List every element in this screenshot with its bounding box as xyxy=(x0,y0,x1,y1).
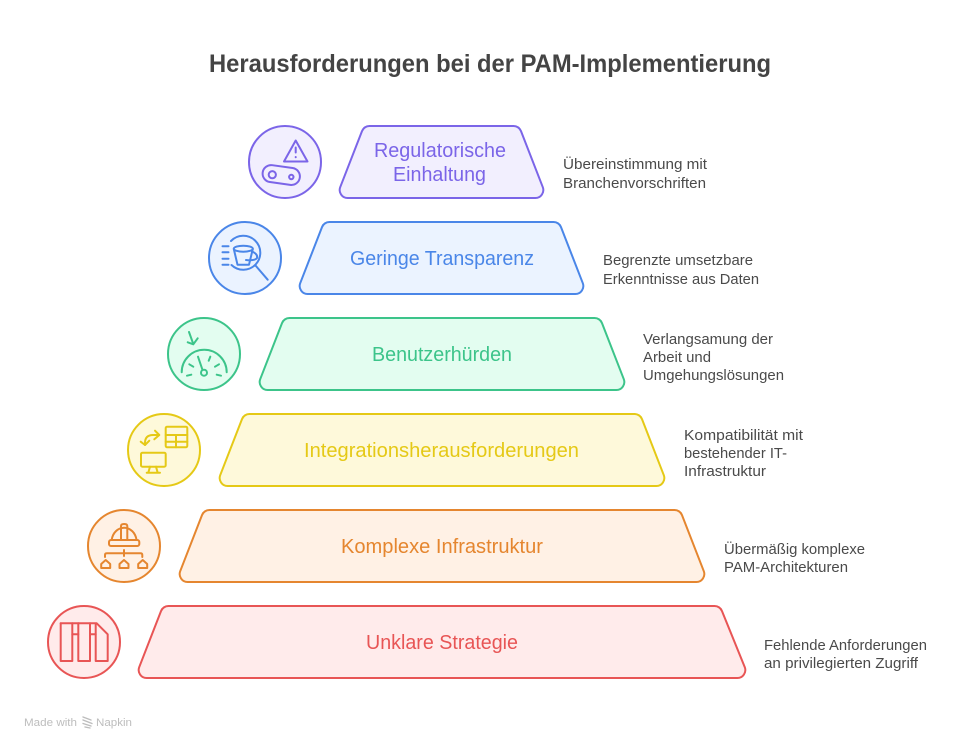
title: Herausforderungen bei der PAM-Implementierung xyxy=(209,50,771,78)
icon: strategy floor plan xyxy=(48,606,120,678)
label: Integrationsherausforderungen: Integrationsherausforderungen xyxy=(304,440,579,462)
description: Benutzerhürden: Arbeit und xyxy=(643,349,711,366)
description: Unklare Strategie xyxy=(764,637,927,672)
trapezoid: Komplexe Infrastruktur xyxy=(180,510,704,582)
label: Unklare Strategie: Unklare Strategie xyxy=(366,632,518,654)
description: Benutzerhürden: Verlangsamung der xyxy=(643,331,773,348)
panel: Benutzerhürden xyxy=(168,318,784,390)
footer: Made with Napkin: Napkin xyxy=(96,717,132,729)
panel: Geringe Transparenz xyxy=(209,222,759,294)
description: Geringe Transparenz xyxy=(603,252,759,288)
description: Regulatorische Einhaltung xyxy=(563,155,708,192)
description: Regulatorische Einhaltung: Übereinstimmung mit xyxy=(563,155,708,173)
panel: Komplexe Infrastruktur xyxy=(88,510,865,582)
footer: Made with Napkin: Made with xyxy=(24,717,77,729)
label: Regulatorische Einhaltung: Einhaltung xyxy=(393,164,486,186)
trapezoid: Unklare Strategie xyxy=(139,606,745,678)
description: Unklare Strategie: Fehlende Anforderungen xyxy=(764,637,927,654)
description: Benutzerhürden xyxy=(643,331,784,384)
icon: warning triangle and conveyor xyxy=(249,126,321,198)
trapezoid: Integrationsherausforderungen xyxy=(220,414,664,486)
description: Komplexe Infrastruktur: Übermäßig komplexe xyxy=(724,540,865,558)
label: Benutzerhürden: Benutzerhürden xyxy=(372,344,512,366)
description: Geringe Transparenz: Begrenzte umsetzbare xyxy=(603,252,753,269)
label: Komplexe Infrastruktur: Komplexe Infrastruktur xyxy=(341,536,543,558)
description: Geringe Transparenz: Erkenntnisse aus Daten xyxy=(603,271,759,288)
trapezoid: Benutzerhürden xyxy=(260,318,624,390)
label: Geringe Transparenz: Geringe Transparenz xyxy=(350,248,534,270)
label: Regulatorische Einhaltung xyxy=(374,140,506,186)
trapezoid: Geringe Transparenz xyxy=(300,222,583,294)
panel: Unklare Strategie xyxy=(48,606,927,678)
icon: table, arrows and monitor xyxy=(128,414,200,486)
description: Regulatorische Einhaltung: Branchenvorschriften xyxy=(563,175,706,192)
description: Integrationsherausforderungen: bestehender IT- xyxy=(684,445,787,462)
description: Komplexe Infrastruktur xyxy=(724,540,865,576)
description: Integrationsherausforderungen xyxy=(684,427,804,480)
icon: magnifier over bucket xyxy=(209,222,281,294)
panel: Regulatorische Einhaltung xyxy=(249,126,708,198)
description: Benutzerhürden: Umgehungslösungen xyxy=(643,367,784,384)
trapezoid: Regulatorische Einhaltung xyxy=(340,126,543,198)
description: Integrationsherausforderungen: Kompatibilität mit xyxy=(684,427,804,444)
description: Komplexe Infrastruktur: PAM-Architekturen xyxy=(724,559,848,576)
footer: Made with Napkin xyxy=(24,717,132,729)
description: Integrationsherausforderungen: Infrastruktur xyxy=(684,463,766,480)
label: Regulatorische Einhaltung: Regulatorische xyxy=(374,140,506,162)
icon: hard hat and hierarchy xyxy=(88,510,160,582)
icon: speedometer xyxy=(168,318,240,390)
description: Unklare Strategie: an privilegierten Zugriff xyxy=(764,655,919,672)
panel: Integrationsherausforderungen xyxy=(128,414,804,486)
